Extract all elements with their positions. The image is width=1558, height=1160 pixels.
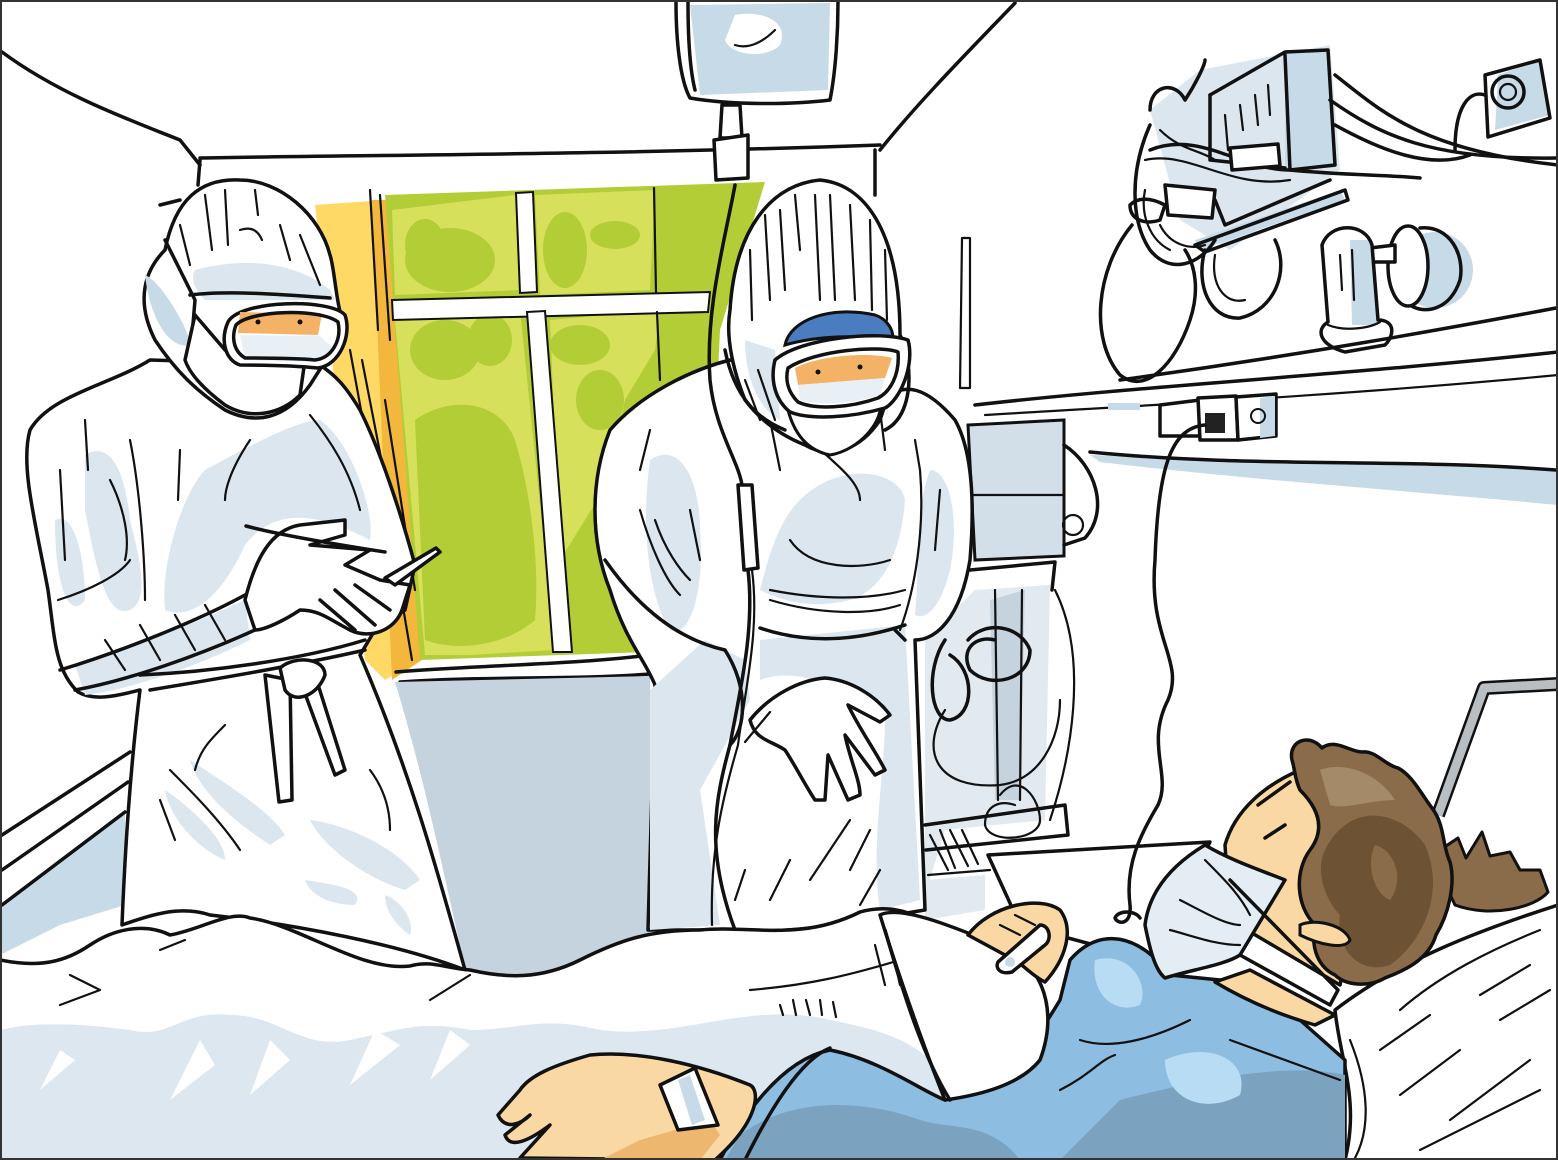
room walls and ceiling lines — [0, 3, 1015, 955]
patient lying in bed — [498, 425, 1558, 1160]
patient arm and bandage — [498, 1054, 755, 1160]
window with curtain and trees — [315, 182, 765, 682]
surgical mask — [1145, 845, 1285, 978]
face — [1225, 770, 1370, 985]
patient hand with pulse clip — [968, 903, 1067, 982]
oxygen tube and sheet board — [988, 842, 1210, 960]
doctor left: hands, pen and notepad — [245, 520, 410, 634]
doctor left with notepad — [27, 180, 465, 970]
doctor right: gloved hand — [750, 678, 890, 800]
doctor left: gown — [27, 360, 465, 970]
hair bun — [1440, 832, 1548, 911]
doctor right in protective suit — [595, 180, 972, 931]
ventilator stand with tubes — [925, 562, 1074, 920]
doctor right: gown — [595, 360, 972, 931]
blue gown — [720, 939, 1345, 1160]
bed sheet — [0, 909, 1060, 1160]
pillow — [1335, 905, 1558, 1160]
wall shelf rail and socket — [960, 238, 1558, 505]
doctor right: goggles — [773, 336, 910, 417]
doctor left: goggles — [224, 304, 347, 368]
ear — [1300, 922, 1350, 945]
wall panel under window — [395, 676, 650, 975]
doctor left: waist ties — [150, 650, 365, 690]
bed head frame — [1438, 684, 1558, 815]
medical monitor behind doctor — [968, 420, 1098, 560]
doctor left: hood and face — [160, 200, 180, 205]
doctor right: IV tube — [709, 185, 742, 485]
power cord — [1115, 425, 1205, 922]
neck and ear — [1215, 970, 1335, 1025]
hair — [1291, 740, 1452, 984]
doctor right: hood and mask — [729, 180, 905, 452]
IV bag and drip line — [676, 2, 838, 180]
sheet fold over patient — [880, 912, 1048, 1100]
wall equipment with hanging cables — [1100, 45, 1558, 381]
